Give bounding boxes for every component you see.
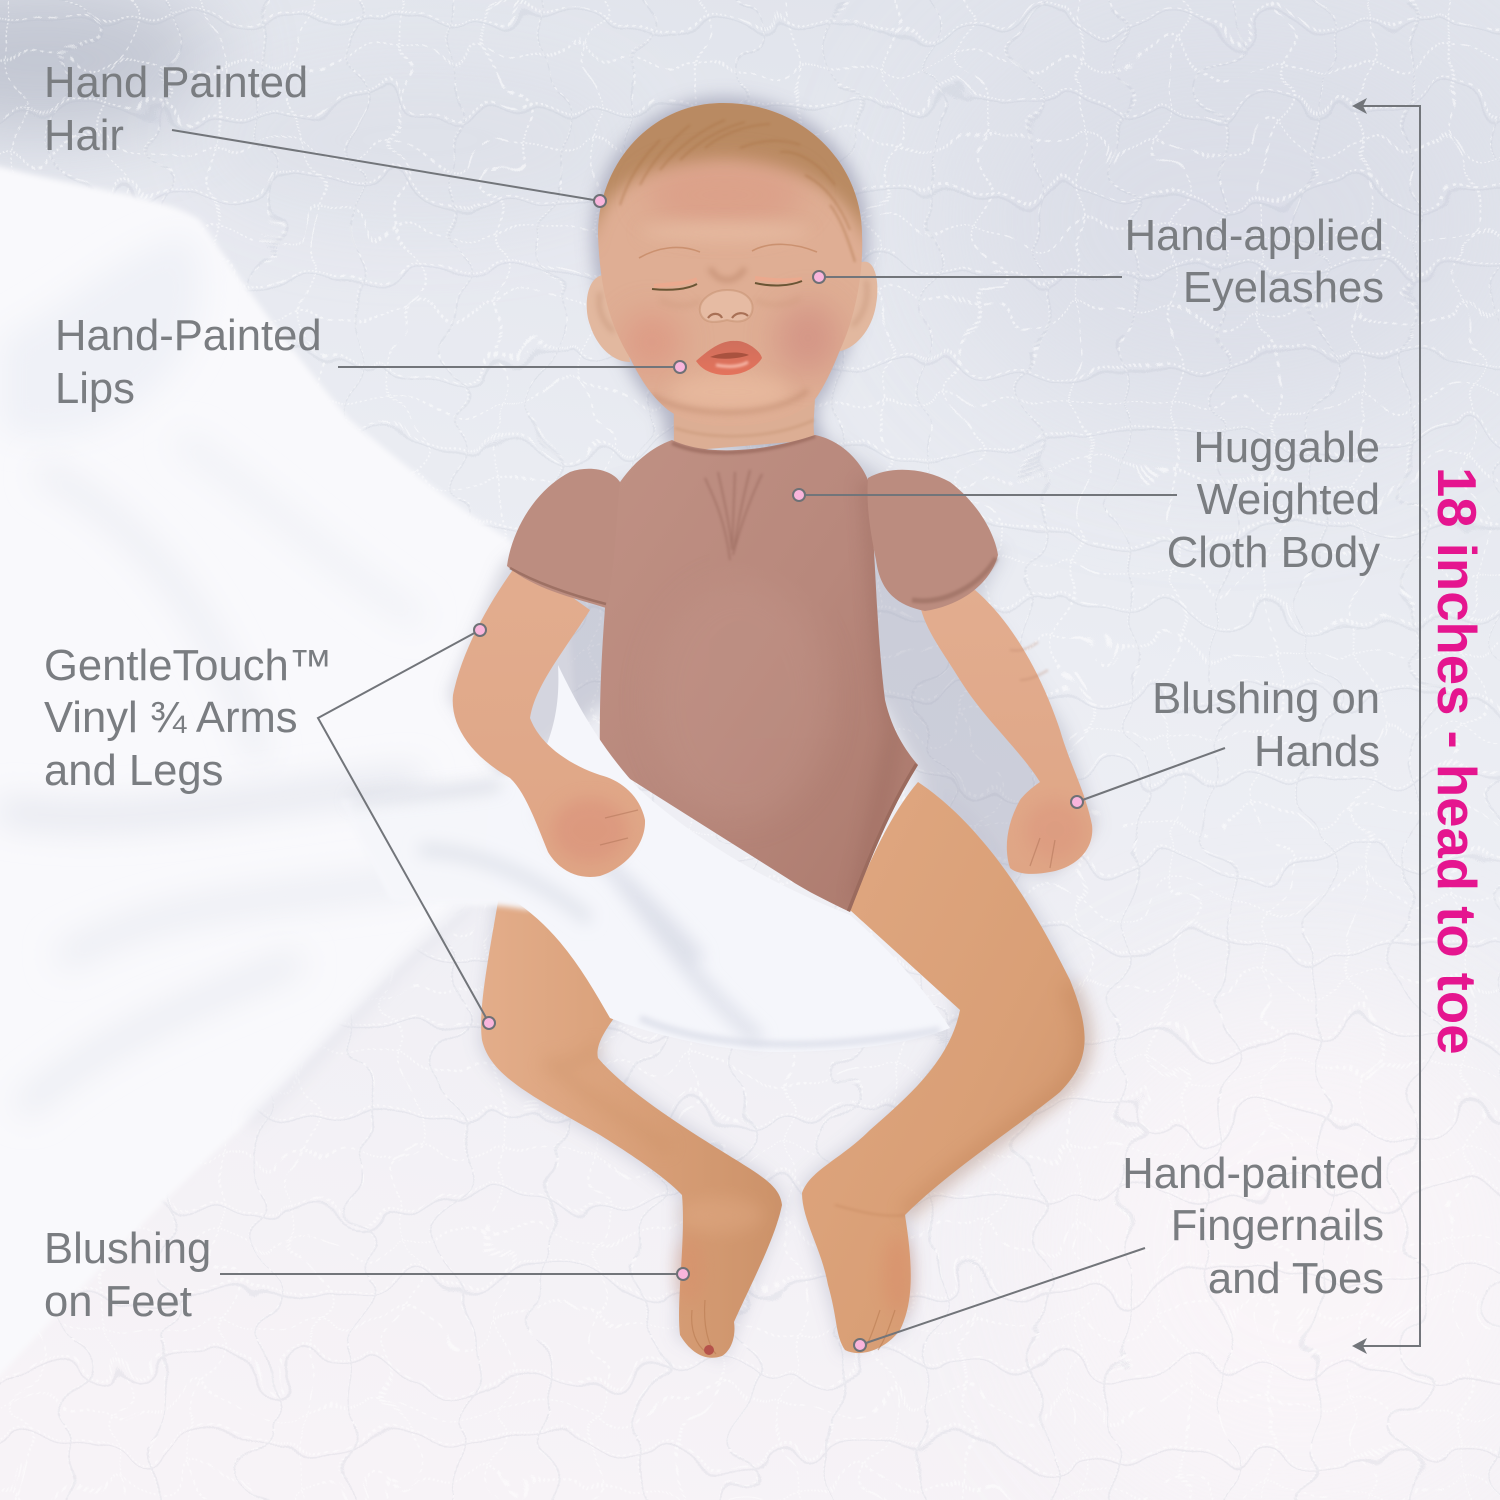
left arm with fist	[453, 560, 645, 877]
height bracket with arrows	[1352, 98, 1420, 1354]
callout: vinyl arms and legs	[44, 624, 495, 1029]
callout: lips	[55, 312, 686, 413]
callout: fingernails and toes	[854, 1150, 1384, 1351]
blanket: white muslin on the left	[0, 150, 590, 1440]
callout: cloth body: Huggable	[1193, 424, 1380, 472]
eyebrows	[639, 244, 817, 258]
callout: vinyl arms and legs: Vinyl ¾ Arms	[44, 694, 298, 742]
callout: eyelashes: Eyelashes	[1183, 264, 1384, 312]
height label: 18 inches - head to toe	[1426, 467, 1487, 1055]
left leg	[481, 890, 782, 1358]
right puffed sleeve	[867, 470, 998, 611]
left puffed sleeve	[507, 469, 620, 608]
callout: lips: Hand-Painted	[55, 312, 322, 360]
callout: hand painted hair: Hair	[44, 112, 124, 160]
callout: cloth body	[793, 424, 1380, 577]
callout: blushing on feet: Blushing	[44, 1225, 211, 1273]
callout: cloth body: Cloth Body	[1167, 529, 1380, 577]
callout: blushing on feet	[44, 1225, 689, 1326]
painted hair strokes	[620, 120, 855, 262]
white blanket draped over the body	[340, 665, 950, 1052]
callout: eyelashes	[813, 212, 1384, 312]
callout: fingernails and toes: Fingernails	[1171, 1202, 1384, 1250]
callout: blushing on hands: Hands	[1254, 728, 1380, 776]
neck	[672, 395, 815, 452]
doll	[340, 90, 1092, 1358]
head	[598, 103, 862, 416]
callout: hand painted hair	[44, 59, 606, 207]
ears	[587, 262, 877, 362]
callout: vinyl arms and legs: and Legs	[44, 747, 223, 795]
cloth body	[600, 435, 918, 912]
doll: soft contact shadow	[453, 103, 1092, 1356]
nose	[700, 290, 753, 322]
callout: vinyl arms and legs: GentleTouch™	[44, 642, 332, 690]
eyelids and lashes	[652, 278, 802, 290]
callout: blushing on hands	[1071, 675, 1380, 808]
callout: hand painted hair: Hand Painted	[44, 59, 308, 107]
callout: blushing on hands: Blushing on	[1152, 675, 1380, 723]
right leg	[802, 782, 1085, 1353]
callout: blushing on feet: on Feet	[44, 1278, 192, 1326]
callout: eyelashes: Hand-applied	[1125, 212, 1384, 260]
right arm	[920, 590, 1092, 874]
callout: fingernails and toes: and Toes	[1208, 1255, 1384, 1303]
lips	[696, 341, 762, 375]
callout: fingernails and toes: Hand-painted	[1122, 1150, 1384, 1198]
callout: cloth body: Weighted	[1197, 476, 1380, 524]
callout: lips: Lips	[55, 365, 135, 413]
